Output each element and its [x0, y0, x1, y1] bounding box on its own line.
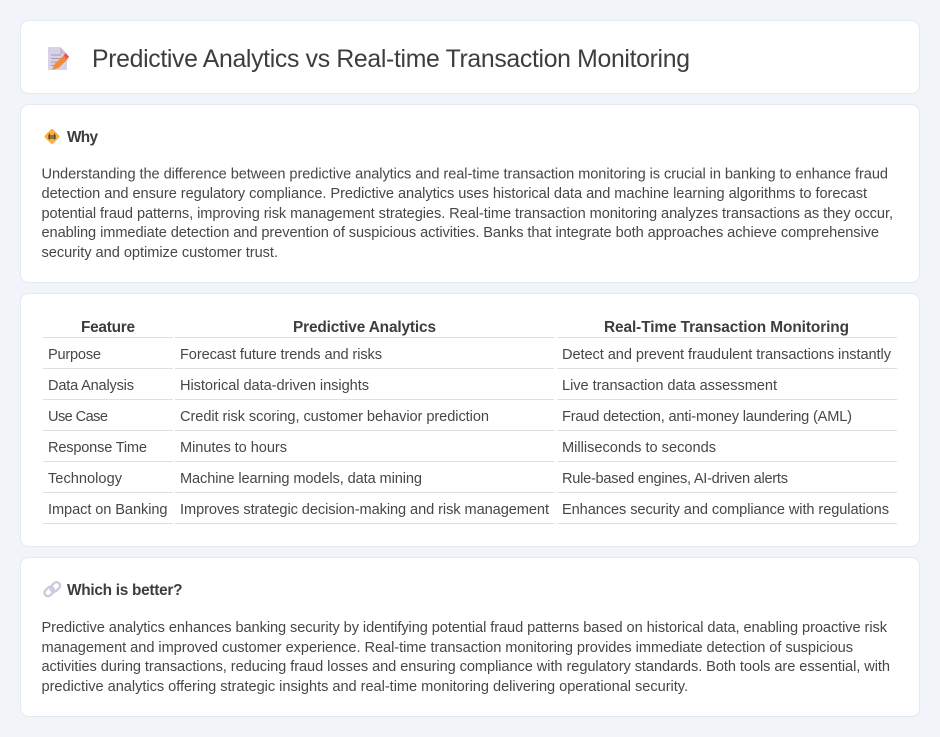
panel: title header: [20, 20, 920, 94]
title: Predictive Analytics vs Real-time Transaction Monitoring: [92, 46, 690, 73]
text block: why paragraph: security and optimize customer trust.: [42, 245, 278, 261]
table row: response time: [48, 440, 716, 456]
table row: response time: Milliseconds to seconds: [562, 440, 716, 456]
text block: why paragraph: enabling immediate detection and prevention of suspicious activities. Banks that integrate both approaches achieve comprehensive: [42, 225, 879, 241]
table row: impact on banking: Improves strategic decision-making and risk management: [180, 502, 549, 518]
table row: purpose: [48, 347, 892, 363]
table grid lines: [43, 337, 897, 524]
text block: why paragraph: potential fraud patterns, improving risk management strategies. Real-time transaction monitoring analyzes transactions as they occur,: [42, 206, 893, 222]
text block: why paragraph: detection and ensure regulatory compliance. Predictive analytics uses historical data and machine learning algorithms to forecast: [42, 186, 867, 202]
table row: data analysis: Live transaction data assessment: [562, 378, 777, 394]
table row: impact on banking: Impact on Banking: [48, 502, 168, 518]
heading: which is better: Which is better?: [67, 582, 182, 599]
panel: comparison table: [20, 294, 920, 546]
table row: use case: Use Case: [48, 409, 108, 425]
icon: document with pencil: [48, 47, 69, 70]
table row: purpose: Detect and prevent fraudulent transactions instantly: [562, 347, 892, 363]
table row: response time: Response Time: [48, 440, 147, 456]
table row: data analysis: [48, 378, 777, 394]
text block: which is better paragraph: [42, 620, 890, 695]
table header row: Real-Time Transaction Monitoring: [604, 319, 849, 336]
text block: which is better paragraph: Predictive analytics enhances banking security by identifying potential fraud patterns based on historical data, enabling proactive risk: [42, 620, 888, 636]
icon: warning diamond: [44, 128, 60, 145]
text block: which is better paragraph: management and improved customer experience. Real-time transaction monitoring provides immediate detection of suspicious: [42, 640, 853, 656]
text block: why paragraph: [42, 166, 893, 261]
table row: technology: Rule-based engines, AI-driven alerts: [562, 471, 788, 487]
table row: data analysis: Historical data-driven insights: [180, 378, 369, 394]
heading: why: Why: [67, 129, 98, 146]
panel: why: [20, 104, 920, 282]
text block: which is better paragraph: activities during transactions, reducing fraud losses and ensuring compliance with regulatory standards. Both tools are essential, with: [42, 659, 890, 675]
table header row: Feature: [81, 319, 135, 336]
icon: chain link: [43, 581, 61, 598]
table row: purpose: Forecast future trends and risks: [180, 347, 382, 363]
table row: impact on banking: [48, 502, 889, 518]
table row: technology: Technology: [48, 471, 123, 487]
table header row: Predictive Analytics: [293, 319, 436, 336]
table row: response time: Minutes to hours: [180, 440, 287, 456]
table row: use case: Credit risk scoring, customer behavior prediction: [180, 409, 489, 425]
table row: technology: [48, 471, 788, 487]
table row: use case: [48, 409, 852, 425]
table header row: [81, 319, 849, 336]
text block: why paragraph: Understanding the difference between predictive analytics and real-time transaction monitoring is crucial in banking to enhance fraud: [42, 166, 888, 182]
panel: which is better: [20, 558, 920, 716]
text block: which is better paragraph: predictive analytics offering strategic insights and real-time monitoring delivering operational security.: [42, 679, 688, 695]
table row: use case: Fraud detection, anti-money laundering (AML): [562, 409, 852, 425]
table row: data analysis: Data Analysis: [48, 378, 134, 394]
table row: purpose: Purpose: [48, 347, 101, 363]
table row: technology: Machine learning models, data mining: [180, 471, 422, 487]
table row: impact on banking: Enhances security and compliance with regulations: [562, 502, 889, 518]
